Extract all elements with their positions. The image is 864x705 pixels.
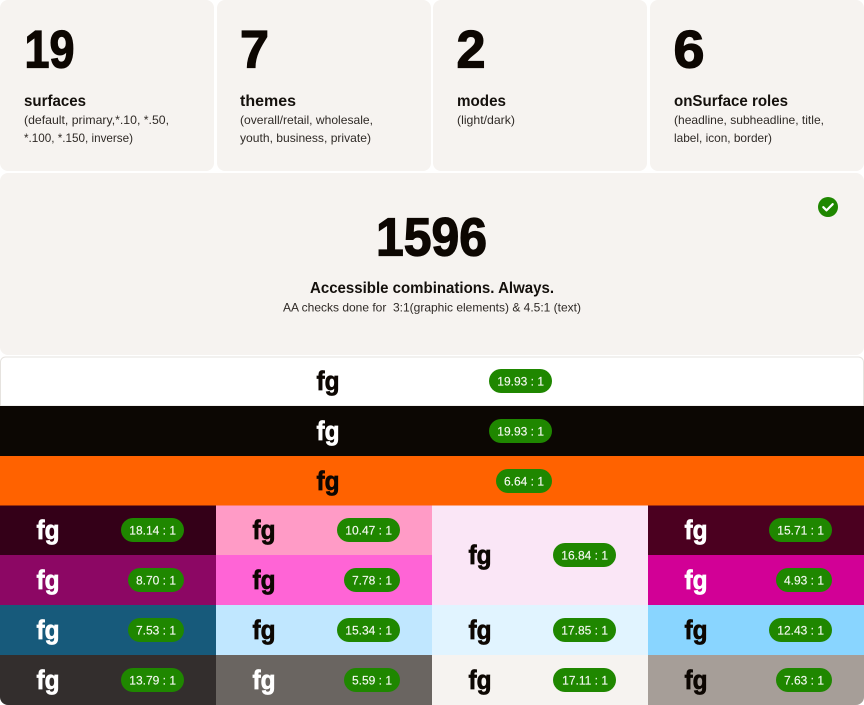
panel: modes stat: (light/dark) xyxy=(457,113,515,127)
panel: modes stat xyxy=(433,0,647,171)
swatch: taupe: 7.63 : 1 xyxy=(784,673,824,687)
row: orange surface xyxy=(0,456,864,506)
swatch: magenta: fg xyxy=(684,565,708,595)
swatch: dark plum xyxy=(0,506,216,555)
panel: themes stat: (overall/retail, wholesale, xyxy=(240,113,373,127)
row: orange surface: fg xyxy=(316,466,340,496)
swatch: taupe xyxy=(648,655,864,705)
panel: surfaces stat: 19 xyxy=(24,20,74,80)
swatch: hot pink: fg xyxy=(252,565,276,595)
swatch: hot pink xyxy=(216,555,432,605)
swatch: light pink: fg xyxy=(252,515,276,545)
swatch: purple xyxy=(0,555,216,605)
icon: check badge xyxy=(818,197,838,217)
swatch: warm grey xyxy=(216,655,432,705)
swatch: deep blue: fg xyxy=(36,615,60,645)
swatch: off white xyxy=(432,655,648,705)
big number 1596: 1596 xyxy=(376,208,487,268)
panel: surfaces stat: (default, primary,*.10, *.50, xyxy=(24,113,169,127)
panel: accessible combinations total xyxy=(0,173,864,355)
swatch: taupe: fg xyxy=(684,665,708,695)
swatch: purple: 8.70 : 1 xyxy=(136,573,176,587)
swatch: pale blue: fg xyxy=(252,615,276,645)
swatch: purple: fg xyxy=(36,565,60,595)
column 1: dark theme surfaces xyxy=(0,506,216,705)
swatch: light pink: 10.47 : 1 xyxy=(345,523,392,537)
swatch: charcoal xyxy=(0,655,216,705)
swatch: magenta xyxy=(648,555,864,605)
panel: themes stat: youth, business, private) xyxy=(240,131,371,145)
panel: themes stat: themes xyxy=(240,93,296,110)
swatch: pale pink, double height: fg xyxy=(468,540,492,570)
row: white surface: fg xyxy=(316,366,340,396)
panel: onSurface roles stat: 6 xyxy=(674,20,704,80)
swatch: dark wine: fg xyxy=(684,515,708,545)
swatch: hot pink: 7.78 : 1 xyxy=(352,573,392,587)
panel: onSurface roles stat xyxy=(650,0,864,171)
swatch: pale blue: 15.34 : 1 xyxy=(345,623,392,637)
panel: modes stat: modes xyxy=(457,93,506,110)
swatch: dark wine xyxy=(648,506,864,555)
swatch: light pink xyxy=(216,506,432,555)
column 3: light theme surfaces xyxy=(432,506,648,705)
panel: themes stat: 7 xyxy=(240,20,269,80)
swatch: very pale blue: fg xyxy=(468,615,492,645)
panel: surfaces stat: surfaces xyxy=(24,93,86,110)
swatch: sky blue: fg xyxy=(684,615,708,645)
row: white surface: 19.93 : 1 xyxy=(497,374,544,388)
swatch: dark wine: 15.71 : 1 xyxy=(777,523,824,537)
swatch: sky blue xyxy=(648,605,864,655)
row: black surface xyxy=(0,406,864,456)
heading: Accessible combinations. Always. xyxy=(310,280,554,297)
row: black surface: 19.93 : 1 xyxy=(497,424,544,438)
swatch: off white: fg xyxy=(468,665,492,695)
swatch: dark plum: fg xyxy=(36,515,60,545)
panel: surfaces stat: *.100, *.150, inverse) xyxy=(24,131,133,145)
panel: onSurface roles stat: (headline, subheadline, title, xyxy=(674,113,824,127)
swatch: magenta: 4.93 : 1 xyxy=(784,573,824,587)
subheading: AA checks done for 3:1(graphic elements) & 4.5:1 (text) xyxy=(283,300,581,314)
row: orange surface: 6.64 : 1 xyxy=(504,474,544,488)
swatch: off white: 17.11 : 1 xyxy=(562,673,608,687)
column 4: accent theme surfaces xyxy=(648,506,864,705)
swatch: dark plum: 18.14 : 1 xyxy=(129,523,176,537)
swatch: deep blue xyxy=(0,605,216,655)
panel: themes stat xyxy=(217,0,431,171)
swatch: very pale blue xyxy=(432,605,648,655)
swatch: pale blue xyxy=(216,605,432,655)
swatch: charcoal: 13.79 : 1 xyxy=(129,673,176,687)
swatch: very pale blue: 17.85 : 1 xyxy=(561,623,608,637)
swatch: deep blue: 7.53 : 1 xyxy=(136,623,176,637)
panel: onSurface roles stat: label, icon, border) xyxy=(674,131,772,145)
swatch: pale pink, double height xyxy=(432,506,648,605)
swatch: sky blue: 12.43 : 1 xyxy=(777,623,824,637)
column 2: mid theme surfaces xyxy=(216,506,432,705)
row: black surface: fg xyxy=(316,416,340,446)
swatch: warm grey: 5.59 : 1 xyxy=(352,673,392,687)
row: white surface xyxy=(0,357,864,406)
swatch: charcoal: fg xyxy=(36,665,60,695)
swatch: pale pink, double height: 16.84 : 1 xyxy=(561,548,608,562)
panel: onSurface roles stat: onSurface roles xyxy=(674,93,788,110)
swatch: warm grey: fg xyxy=(252,665,276,695)
panel: surfaces stat xyxy=(0,0,214,171)
panel: modes stat: 2 xyxy=(456,20,486,80)
